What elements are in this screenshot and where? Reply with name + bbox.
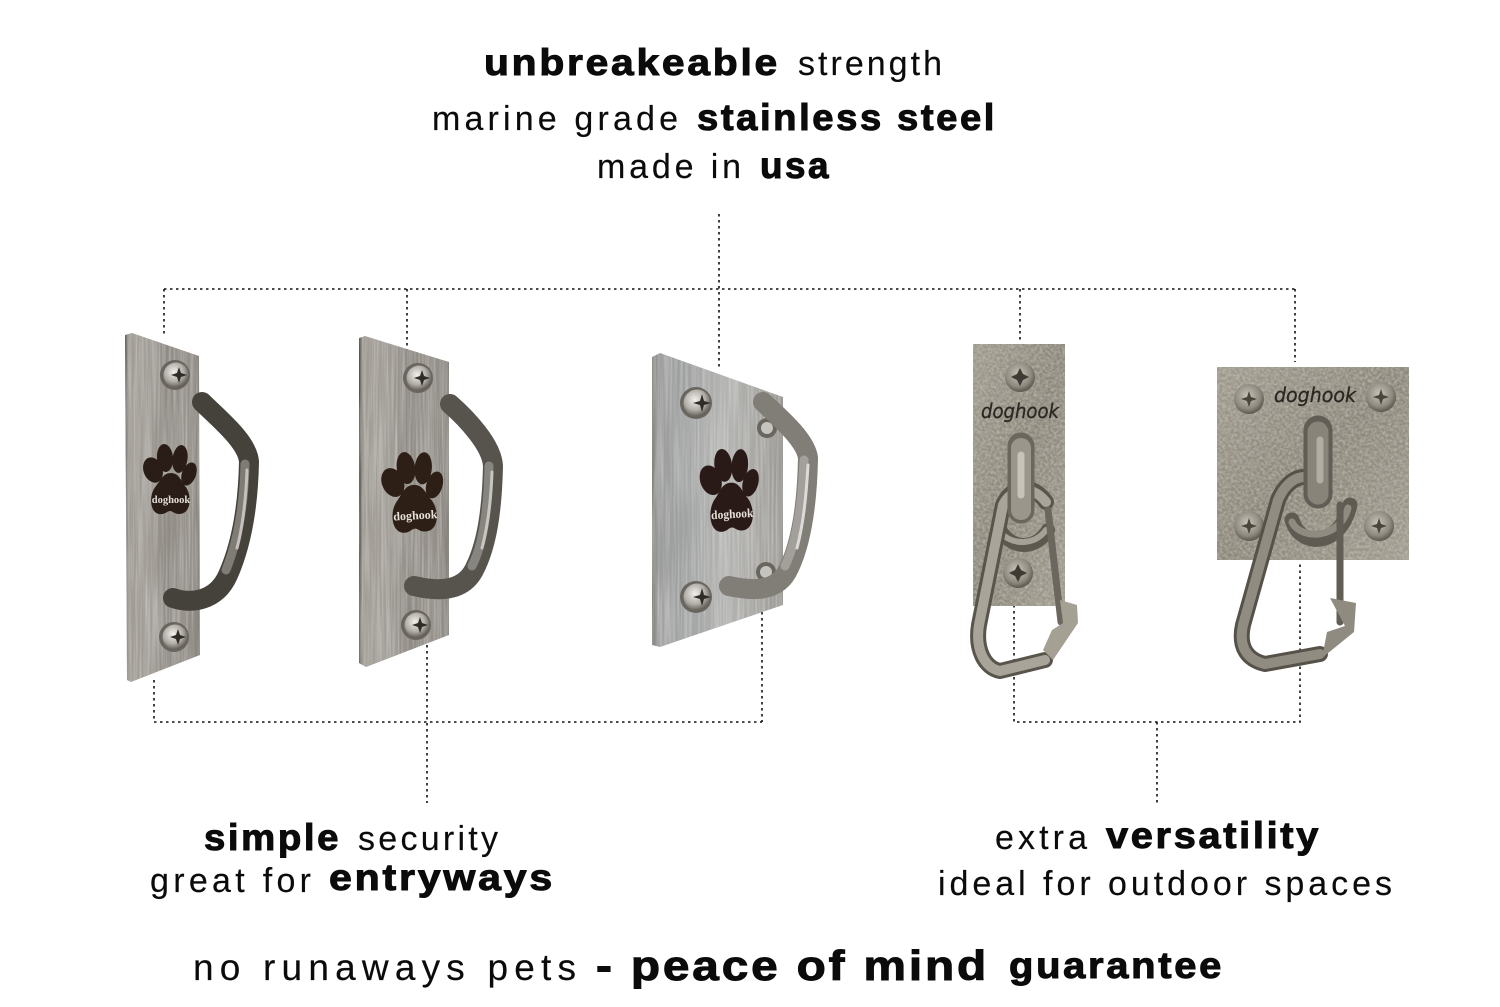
screw: [680, 387, 712, 419]
title: material line: [432, 97, 997, 138]
footer guarantee: guarantee: [1009, 945, 1224, 986]
paw logo: doghook: [711, 505, 754, 522]
title: strength line: [484, 42, 942, 83]
paw logo: [695, 446, 765, 533]
handle: [729, 402, 808, 589]
connector: top bracket: [164, 214, 1295, 368]
handle: [414, 404, 493, 589]
caption: entryways: simple: [204, 817, 341, 858]
paw logo: [376, 449, 449, 534]
connector: bottom left bracket: [154, 612, 762, 803]
eye hook and carabiner: [1242, 430, 1356, 664]
caption: versatility: ideal for outdoor spaces: [938, 865, 1392, 903]
caption: versatility: extra: [995, 819, 1087, 857]
title: strength line: strength: [798, 45, 942, 83]
title: strength line: unbreakeable: [484, 42, 780, 83]
product: handle hook one: [125, 333, 249, 682]
title: material line: marine grade: [432, 100, 678, 138]
caption: versatility: versatility: [1106, 815, 1321, 856]
product: handle hook three: [652, 353, 808, 647]
footer guarantee: - peace of mind: [596, 942, 989, 989]
product: square plate with carabiner: [1217, 367, 1409, 664]
paw logo: [140, 443, 200, 514]
caption: entryways: great for: [150, 862, 311, 900]
screw: [159, 622, 189, 652]
screws: [1234, 382, 1396, 541]
brand text: doghook: [1274, 383, 1357, 407]
product: tall plate with carabiner: [973, 344, 1078, 671]
title: origin line: usa: [760, 145, 831, 186]
screw: [160, 360, 190, 390]
footer guarantee: [193, 942, 1224, 989]
caption: versatility: [938, 815, 1392, 903]
caption: entryways: entryways: [329, 857, 555, 898]
screw: [1003, 558, 1033, 588]
title: origin line: made in: [597, 148, 741, 186]
handle: [173, 402, 249, 601]
screw: [680, 581, 712, 613]
title: origin line: [597, 145, 831, 186]
eye hook and carabiner: [978, 446, 1078, 671]
caption: entryways: [150, 817, 555, 900]
paw logo: doghook: [152, 495, 190, 506]
screw: [403, 363, 433, 393]
caption: entryways: security: [358, 820, 498, 858]
paw logo: doghook: [393, 507, 438, 524]
title: material line: stainless steel: [697, 97, 997, 138]
product: handle hook two: [359, 336, 493, 667]
brand text: doghook: [981, 399, 1060, 423]
screw: [401, 610, 431, 640]
screw: [1005, 362, 1035, 392]
screw rear: [756, 418, 777, 582]
footer guarantee: no runaways pets: [193, 947, 576, 988]
connector: bottom right bracket: [1014, 562, 1300, 803]
